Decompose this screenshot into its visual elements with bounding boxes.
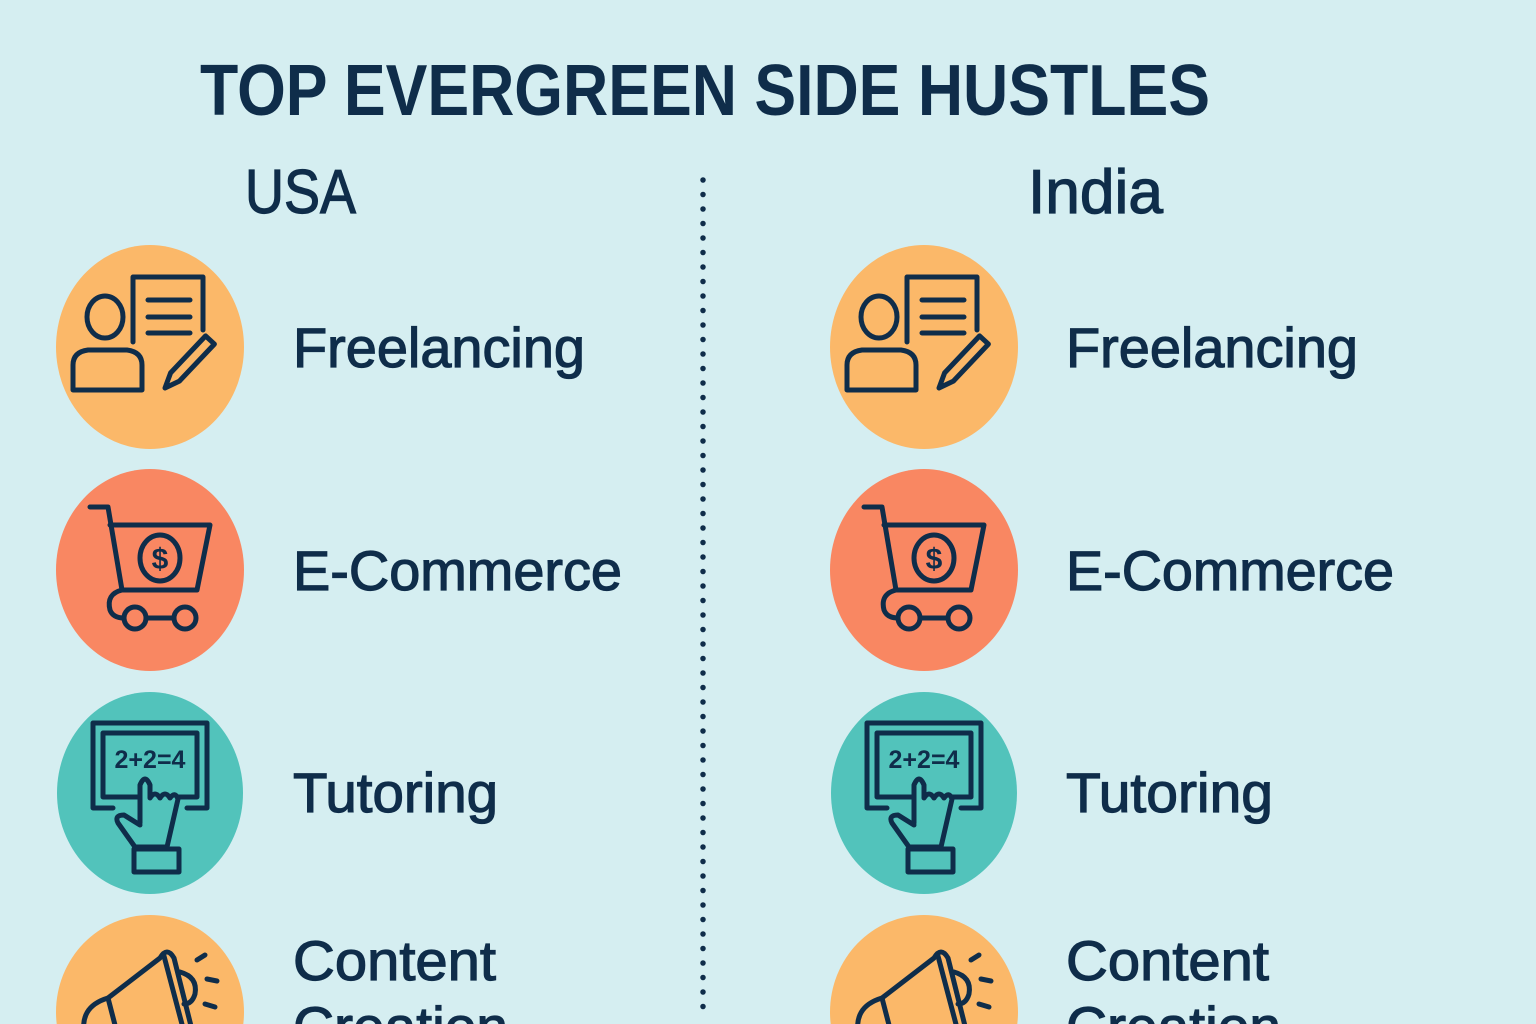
item: content creation	[56, 915, 508, 1024]
item: content creation: Content	[1066, 929, 1269, 992]
item: e-commerce: $	[152, 543, 169, 576]
item: freelancing: Freelancing	[293, 316, 585, 379]
item: tutoring: Tutoring	[1066, 761, 1273, 824]
item: tutoring: 2+2=4	[889, 746, 960, 774]
item: freelancing: Freelancing	[1066, 316, 1358, 379]
title: TOP EVERGREEN SIDE HUSTLES	[200, 51, 1210, 131]
item: tutoring: Tutoring	[293, 761, 498, 824]
item: tutoring	[831, 692, 1273, 894]
panel: USA	[56, 158, 622, 1024]
item: freelancing	[830, 245, 1358, 449]
item: tutoring: 2+2=4	[115, 746, 186, 774]
panel: India	[830, 158, 1394, 1024]
item: e-commerce	[56, 469, 622, 671]
item: content creation	[830, 915, 1281, 1024]
item: freelancing	[56, 245, 585, 449]
item: tutoring	[57, 692, 498, 894]
heading: India: India	[1028, 158, 1164, 227]
item: e-commerce	[830, 469, 1394, 671]
heading: USA: USA	[245, 158, 357, 227]
item: e-commerce: E-Commerce	[293, 539, 622, 602]
item: e-commerce: $	[926, 543, 943, 576]
item: e-commerce: E-Commerce	[1066, 539, 1394, 602]
item: content creation: Content	[293, 929, 496, 992]
divider	[700, 180, 706, 1012]
